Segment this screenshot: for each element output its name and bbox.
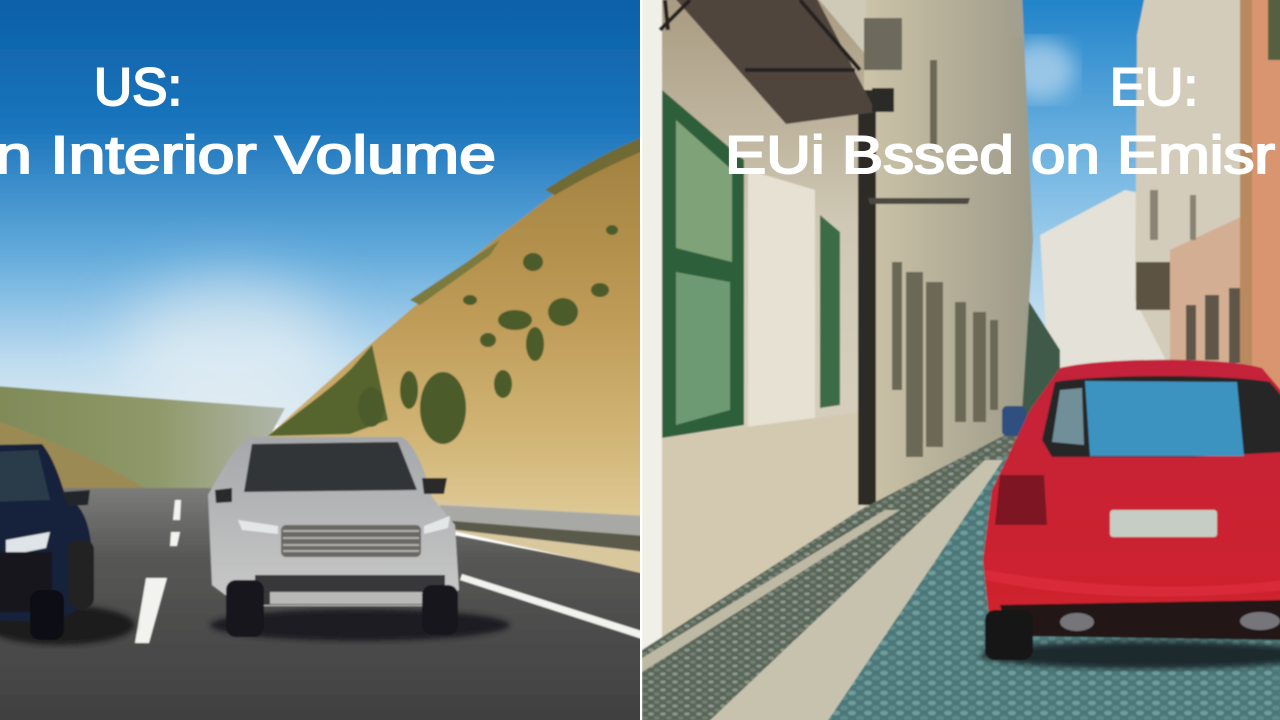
- right buildings: [1135, 0, 1280, 400]
- panel: US highway scene: [0, 0, 645, 720]
- heading: US interior volume: n Interior Volume: [0, 126, 496, 185]
- heading: EU: EU:: [1110, 58, 1198, 117]
- distant hills: [0, 386, 285, 492]
- sidewalk and street: [642, 406, 1280, 720]
- distant buildings: [1039, 189, 1166, 368]
- left building far: [855, 0, 1033, 510]
- hillside: [268, 136, 645, 525]
- sky: [1021, 0, 1145, 327]
- heading: US: US:: [94, 58, 182, 117]
- sky: [0, 0, 645, 425]
- road: [0, 488, 645, 720]
- panel: EU street scene: [642, 0, 1280, 720]
- heading: EU based on emissions: EUi Bssed on Emisr: [725, 126, 1275, 185]
- silver SUV: [208, 437, 510, 641]
- divider: [640, 0, 642, 720]
- awning and lamp: [660, 0, 902, 124]
- guard rail: [440, 505, 645, 552]
- red car: [980, 360, 1280, 669]
- lane markings: [135, 500, 645, 643]
- dark car: [0, 444, 135, 645]
- left building near: [642, 0, 970, 652]
